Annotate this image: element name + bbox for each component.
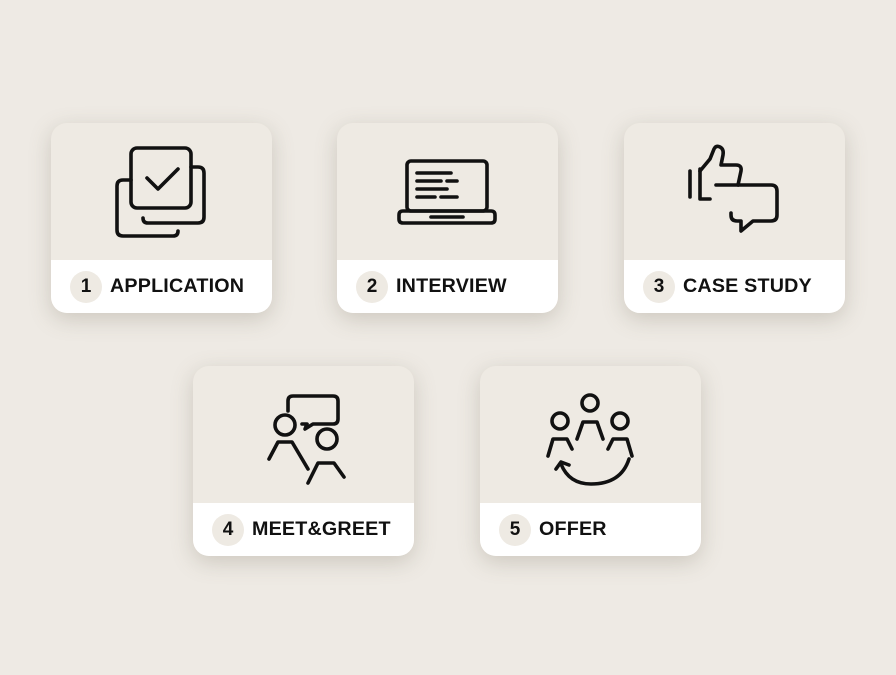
label: 5 offer [480,503,701,556]
icon: two people talking [267,394,346,485]
label: 2 interview [337,260,558,313]
label: 2 interview: 2 [367,276,377,297]
card: application [51,123,272,313]
label: 3 case study [624,260,845,313]
icon: thumbs up and chat [688,144,779,233]
label: 1 application: 1 [81,276,91,297]
label: 5 offer: 5 [510,519,520,540]
icon: checklist [115,146,206,238]
label: 1 application [51,260,272,313]
label: 3 case study: 3 [654,276,664,297]
label: 4 meet & greet: 4 [223,519,233,540]
label: 4 meet & greet: MEET&GREET [252,518,391,540]
card: meet & greet [193,366,414,556]
card: case study [624,123,845,313]
label: 3 case study: CASE STUDY [683,275,812,297]
card: offer [480,366,701,556]
icon: laptop [397,159,497,225]
label: 5 offer: OFFER [539,518,607,540]
label: 4 meet & greet [193,503,414,556]
icon: group cycle [546,393,634,486]
label: 2 interview: INTERVIEW [396,275,507,297]
card: interview [337,123,558,313]
label: 1 application: APPLICATION [110,275,244,297]
